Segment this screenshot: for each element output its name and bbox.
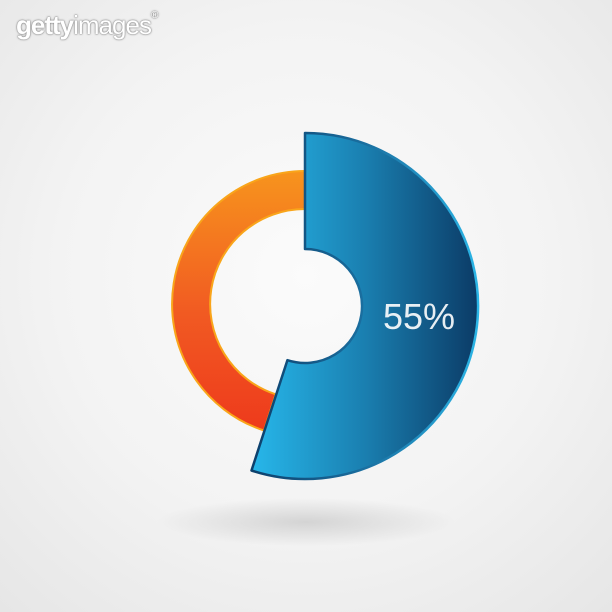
watermark: gettyimages: gettyimages® (16, 10, 157, 40)
segment: blue 55% (252, 133, 478, 479)
label: 55%: 55% (383, 296, 455, 337)
segment: orange 45% (172, 171, 305, 430)
shadow (156, 498, 456, 546)
